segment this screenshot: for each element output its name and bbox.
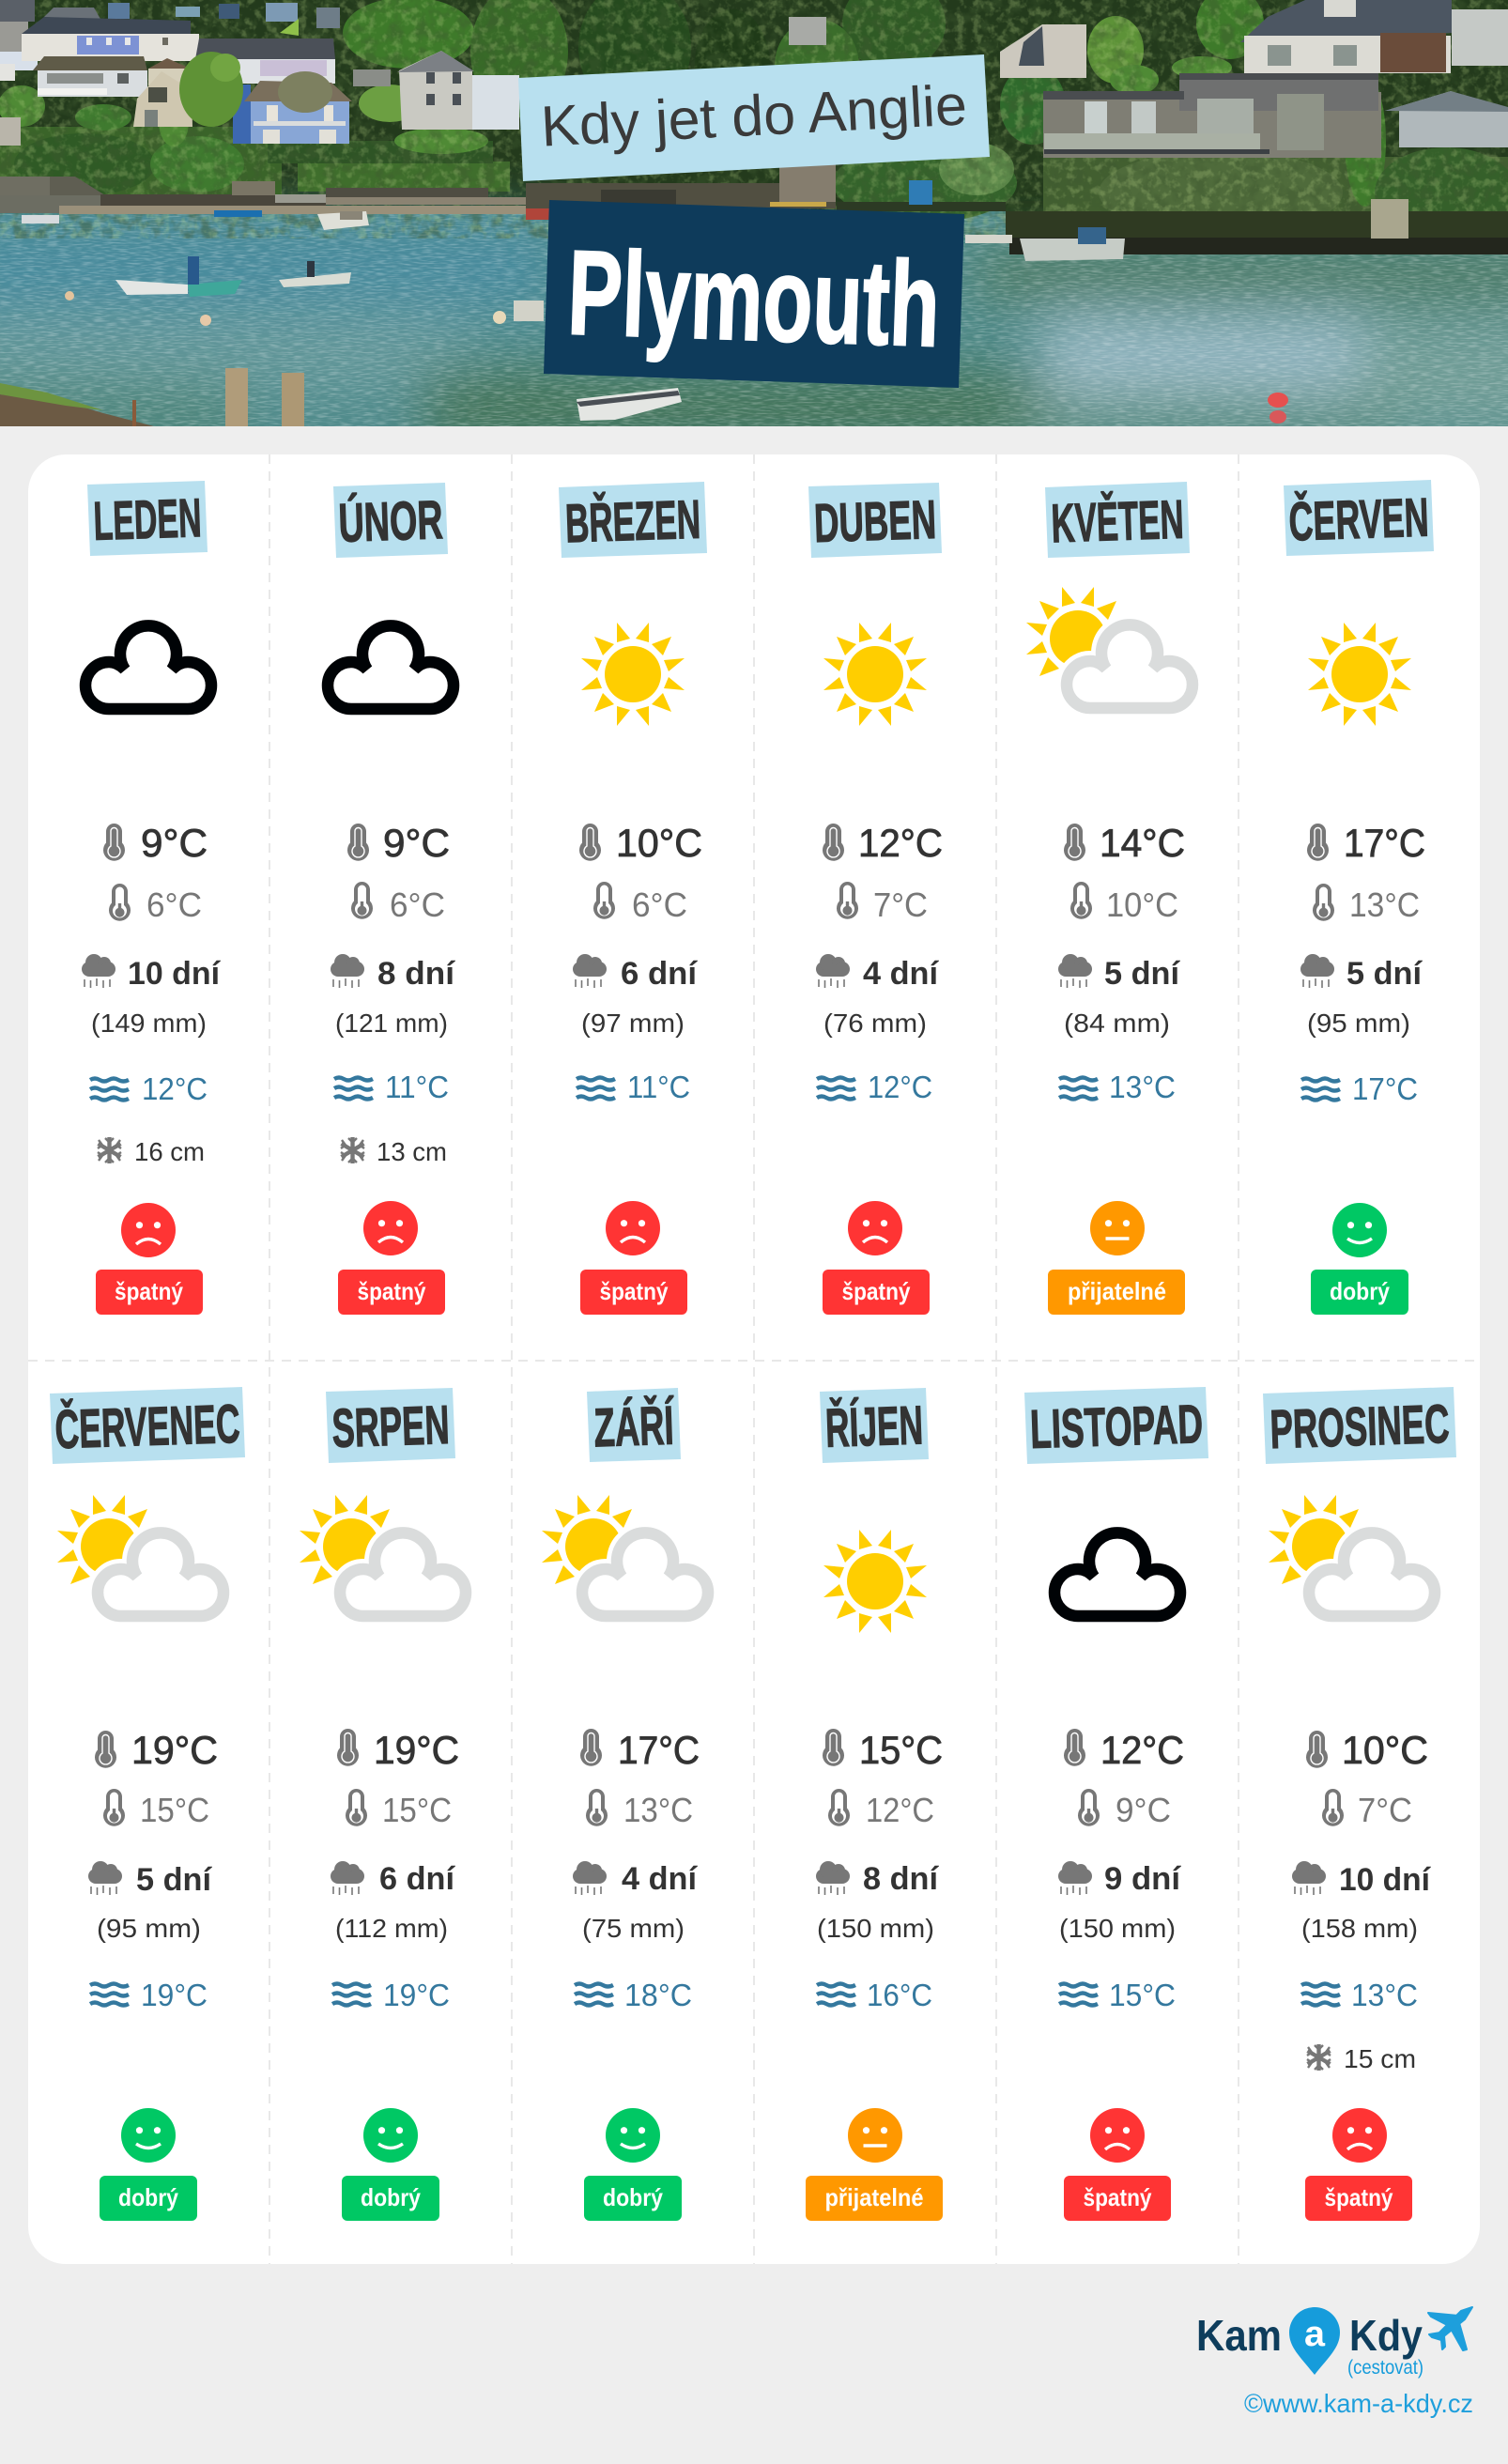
panel: monthly climate table xyxy=(28,454,1480,2264)
rating face xyxy=(848,1201,902,1255)
rain days: 10 dní xyxy=(1339,1862,1432,1898)
rating face xyxy=(363,2108,418,2163)
max temperature: 19°C xyxy=(374,1728,459,1772)
month label: BŘEZEN: BŘEZEN xyxy=(564,489,701,554)
rating face xyxy=(363,1201,418,1255)
sea temperature xyxy=(1301,1978,1418,2012)
column: prosinec xyxy=(1263,1387,1456,2221)
month label: LISTOPAD xyxy=(1024,1387,1208,1464)
max temperature xyxy=(823,821,943,865)
sea temperature xyxy=(90,1978,208,2012)
month label: KVĚTEN: KVĚTEN xyxy=(1051,489,1185,554)
max temperature xyxy=(1064,821,1185,865)
min temperature: 15°C xyxy=(140,1791,209,1829)
title banner: Plymouth: Plymouth xyxy=(565,225,942,373)
rating badge xyxy=(580,1270,687,1315)
min temperature: 13°C xyxy=(1349,886,1420,924)
rating badge: špatný xyxy=(1324,2183,1393,2211)
houses: left hillside xyxy=(0,0,519,146)
max temperature xyxy=(1306,1728,1428,1772)
rain days: 8 dní xyxy=(377,956,456,992)
rating face xyxy=(606,1201,660,1255)
sea temperature xyxy=(817,1070,932,1104)
sea temperature: 15°C xyxy=(1109,1978,1176,2012)
rain days xyxy=(88,1861,213,1898)
rating badge xyxy=(1048,1270,1185,1315)
sea temperature: 19°C xyxy=(383,1978,450,2012)
max temperature: 9°C xyxy=(141,821,208,865)
snow xyxy=(341,1137,447,1166)
min temperature: 15°C xyxy=(382,1791,452,1829)
icon: cloud xyxy=(1054,1532,1180,1616)
rating badge: přijatelné xyxy=(824,2183,924,2211)
precipitation: (149 mm) xyxy=(91,1009,207,1038)
rain days: 5 dní xyxy=(1346,956,1423,992)
rating badge: přijatelné xyxy=(1068,1277,1166,1305)
logo: Kam a Kdy: Kam xyxy=(1196,2311,1282,2360)
column: březen xyxy=(559,482,707,1315)
rating face xyxy=(121,1203,176,1257)
rating face xyxy=(606,2108,660,2163)
month label: LISTOPAD: LISTOPAD xyxy=(1029,1394,1204,1460)
rain days: 5 dní xyxy=(136,1862,213,1898)
sea temperature: 11°C xyxy=(627,1070,690,1104)
column: únor xyxy=(328,483,456,1315)
precipitation: (121 mm) xyxy=(335,1009,448,1038)
icon: sun xyxy=(823,1530,927,1633)
precipitation: (75 mm) xyxy=(582,1914,685,1943)
max temperature: 15°C xyxy=(859,1728,943,1772)
rating badge: dobrý xyxy=(361,2183,421,2211)
month label: ŘÍJEN: ŘÍJEN xyxy=(824,1394,924,1459)
rating badge: špatný xyxy=(115,1277,183,1305)
snow: 15 cm xyxy=(1344,2044,1416,2073)
max temperature xyxy=(95,1728,218,1772)
rating badge xyxy=(584,2176,682,2221)
month label: ŘÍJEN xyxy=(820,1388,929,1463)
column: květen xyxy=(1026,482,1193,1315)
icon: sun behind cloud xyxy=(300,1495,466,1616)
precipitation: (150 mm) xyxy=(817,1914,934,1943)
min temperature: 6°C xyxy=(390,886,445,924)
precipitation: (76 mm) xyxy=(823,1009,927,1038)
month label: LEDEN: LEDEN xyxy=(93,487,203,552)
rain days: 4 dní xyxy=(622,1861,699,1897)
min temperature xyxy=(593,882,687,924)
precipitation: (97 mm) xyxy=(581,1009,685,1038)
min temperature: 13°C xyxy=(623,1791,693,1829)
sea temperature xyxy=(1301,1071,1418,1106)
sea temperature: 13°C xyxy=(1351,1978,1418,2012)
rating badge xyxy=(96,1270,203,1315)
rating badge xyxy=(1311,1270,1408,1315)
min temperature xyxy=(109,884,202,924)
max temperature: 9°C xyxy=(383,821,450,865)
sea temperature: 12°C xyxy=(142,1071,208,1106)
rain days: 9 dní xyxy=(1104,1861,1182,1897)
max temperature: 12°C xyxy=(858,821,943,865)
min temperature xyxy=(1322,1789,1412,1829)
month label: ÚNOR xyxy=(333,483,448,558)
snow xyxy=(98,1137,205,1166)
month label: DUBEN xyxy=(808,483,942,558)
max temperature xyxy=(823,1728,943,1772)
month label: ČERVENEC: ČERVENEC xyxy=(54,1394,241,1460)
rating badge: špatný xyxy=(841,1277,911,1305)
max temperature xyxy=(337,1728,459,1772)
column: leden xyxy=(82,481,222,1315)
snow xyxy=(1307,2044,1416,2073)
month label: BŘEZEN xyxy=(559,482,707,558)
icon: airplane xyxy=(1428,2307,1472,2350)
max temperature: 17°C xyxy=(618,1728,700,1772)
min temperature: 10°C xyxy=(1106,886,1178,924)
month label: DUBEN: DUBEN xyxy=(813,489,937,554)
min temperature: 7°C xyxy=(1358,1791,1412,1829)
max temperature: 10°C xyxy=(616,821,702,865)
precipitation: (112 mm) xyxy=(335,1914,448,1943)
precipitation: (95 mm) xyxy=(1307,1009,1410,1038)
month label: ČERVEN xyxy=(1284,480,1434,556)
rating badge: dobrý xyxy=(1330,1277,1390,1305)
rain days: 10 dní xyxy=(128,956,222,992)
logo: Kam a Kdy xyxy=(1196,2307,1472,2379)
sea temperature: 16°C xyxy=(867,1978,932,2012)
sea temperature xyxy=(817,1978,932,2012)
max temperature xyxy=(580,1728,700,1772)
snow: 13 cm xyxy=(377,1137,447,1166)
min temperature xyxy=(586,1789,693,1829)
sea temperature xyxy=(575,1978,692,2012)
icon: cloud xyxy=(85,625,211,709)
column: červenec xyxy=(50,1387,245,2221)
column: duben xyxy=(808,483,943,1315)
icon: cloud xyxy=(328,625,454,709)
icon: sun behind cloud xyxy=(1269,1495,1435,1616)
precipitation: (84 mm) xyxy=(1064,1009,1170,1038)
column: srpen xyxy=(300,1388,466,2221)
shoreline walls xyxy=(0,164,1508,254)
min temperature xyxy=(1078,1789,1171,1829)
precipitation: (150 mm) xyxy=(1059,1914,1176,1943)
sea temperature xyxy=(1059,1978,1176,2012)
logo: Kam a Kdy: a xyxy=(1304,2315,1326,2354)
min temperature xyxy=(346,1789,452,1829)
min temperature: 7°C xyxy=(873,886,928,924)
logo: Kam a Kdy: (cestovat) xyxy=(1347,2357,1423,2379)
rating face xyxy=(1332,2108,1387,2163)
title banner: Plymouth xyxy=(544,200,964,388)
precipitation: (95 mm) xyxy=(97,1914,201,1943)
min temperature xyxy=(837,882,928,924)
max temperature: 14°C xyxy=(1100,821,1185,865)
rating face xyxy=(121,2108,176,2163)
icon: sun behind cloud xyxy=(57,1495,223,1616)
icon: sun behind cloud xyxy=(542,1495,708,1616)
max temperature: 10°C xyxy=(1342,1728,1428,1772)
min temperature xyxy=(1313,884,1420,924)
max temperature: 12°C xyxy=(1100,1728,1184,1772)
rain days xyxy=(816,1861,940,1897)
rating badge xyxy=(100,2176,197,2221)
rain days xyxy=(1292,1861,1432,1898)
rating badge xyxy=(823,1270,930,1315)
title banner: Kdy jet do Anglie xyxy=(518,54,990,181)
column: listopad xyxy=(1024,1387,1208,2221)
rating badge: dobrý xyxy=(118,2183,178,2211)
rain days xyxy=(1058,954,1181,992)
rating badge: špatný xyxy=(1084,2183,1152,2211)
rating badge: špatný xyxy=(357,1277,426,1305)
mooring posts and rocks xyxy=(0,291,1288,426)
month label: SRPEN: SRPEN xyxy=(331,1394,451,1459)
icon: sun xyxy=(581,623,685,726)
max temperature xyxy=(1307,821,1425,865)
column: říjen xyxy=(806,1388,943,2221)
rating badge: dobrý xyxy=(603,2183,663,2211)
min temperature xyxy=(828,1789,934,1829)
sea temperature xyxy=(332,1978,450,2012)
sea temperature: 13°C xyxy=(1109,1070,1176,1104)
max temperature: 19°C xyxy=(131,1728,218,1772)
rain days xyxy=(1058,1861,1182,1897)
min temperature: 12°C xyxy=(866,1791,934,1829)
houses: right hillside xyxy=(789,0,1508,158)
rain days xyxy=(1300,954,1423,992)
min temperature xyxy=(351,882,445,924)
rain days xyxy=(82,954,222,992)
icon: sun behind cloud xyxy=(1026,587,1193,708)
month label: ÚNOR: ÚNOR xyxy=(338,489,444,554)
rating badge xyxy=(1064,2176,1171,2221)
min temperature xyxy=(103,1789,209,1829)
column: červen xyxy=(1284,480,1434,1315)
rain days xyxy=(331,1861,456,1897)
max temperature: 17°C xyxy=(1344,821,1425,865)
rain days: 6 dní xyxy=(379,1861,456,1897)
month label: ZÁŘÍ: ZÁŘÍ xyxy=(592,1395,676,1458)
max temperature xyxy=(347,821,450,865)
sea temperature xyxy=(334,1070,449,1104)
max temperature xyxy=(103,821,208,865)
month label: ZÁŘÍ xyxy=(587,1388,681,1462)
logo: Kam a Kdy: Kdy xyxy=(1349,2311,1423,2360)
column: září xyxy=(542,1388,708,2221)
min temperature: 6°C xyxy=(146,886,202,924)
icon: sun xyxy=(1308,623,1411,726)
rating badge xyxy=(338,1270,445,1315)
rain days xyxy=(573,954,699,992)
boats xyxy=(22,208,1125,421)
sea temperature: 19°C xyxy=(141,1978,208,2012)
month label: ČERVENEC xyxy=(50,1387,245,1464)
sea temperature: 12°C xyxy=(868,1070,932,1104)
rating badge xyxy=(342,2176,439,2221)
min temperature: 6°C xyxy=(632,886,687,924)
sea temperature: 11°C xyxy=(385,1070,449,1104)
rating face xyxy=(848,2108,902,2163)
rain days xyxy=(816,954,940,992)
rain days: 6 dní xyxy=(621,956,699,992)
month label: KVĚTEN xyxy=(1045,482,1190,558)
snow: 16 cm xyxy=(134,1137,205,1166)
sea temperature xyxy=(577,1070,690,1104)
rating face xyxy=(1090,2108,1145,2163)
rain days xyxy=(331,954,456,992)
icon: map pin xyxy=(1289,2307,1340,2375)
min temperature xyxy=(1070,882,1178,924)
max temperature xyxy=(579,821,702,865)
rating badge xyxy=(1305,2176,1412,2221)
precipitation: (158 mm) xyxy=(1301,1914,1418,1943)
rain days: 4 dní xyxy=(863,956,940,992)
sea temperature xyxy=(1059,1070,1176,1104)
sea temperature: 17°C xyxy=(1352,1071,1418,1106)
rain days xyxy=(573,1861,699,1897)
min temperature: 9°C xyxy=(1116,1791,1171,1829)
rating face xyxy=(1090,1201,1145,1255)
hero photo: harbour with houses and boats xyxy=(0,0,1508,446)
rating badge xyxy=(806,2176,943,2221)
source url: ©www.kam-a-kdy.cz xyxy=(1244,2389,1473,2418)
max temperature xyxy=(1064,1728,1184,1772)
month label: LEDEN xyxy=(87,481,208,556)
month label: SRPEN xyxy=(326,1388,455,1463)
rain days: 8 dní xyxy=(863,1861,940,1897)
rating badge: špatný xyxy=(599,1277,669,1305)
title banner: Kdy jet do Anglie: Kdy jet do Anglie xyxy=(539,72,968,159)
sea temperature xyxy=(90,1071,208,1106)
icon: sun xyxy=(823,623,927,726)
sea temperature: 18°C xyxy=(624,1978,692,2012)
rain days: 5 dní xyxy=(1104,956,1181,992)
rating face xyxy=(1332,1203,1387,1257)
